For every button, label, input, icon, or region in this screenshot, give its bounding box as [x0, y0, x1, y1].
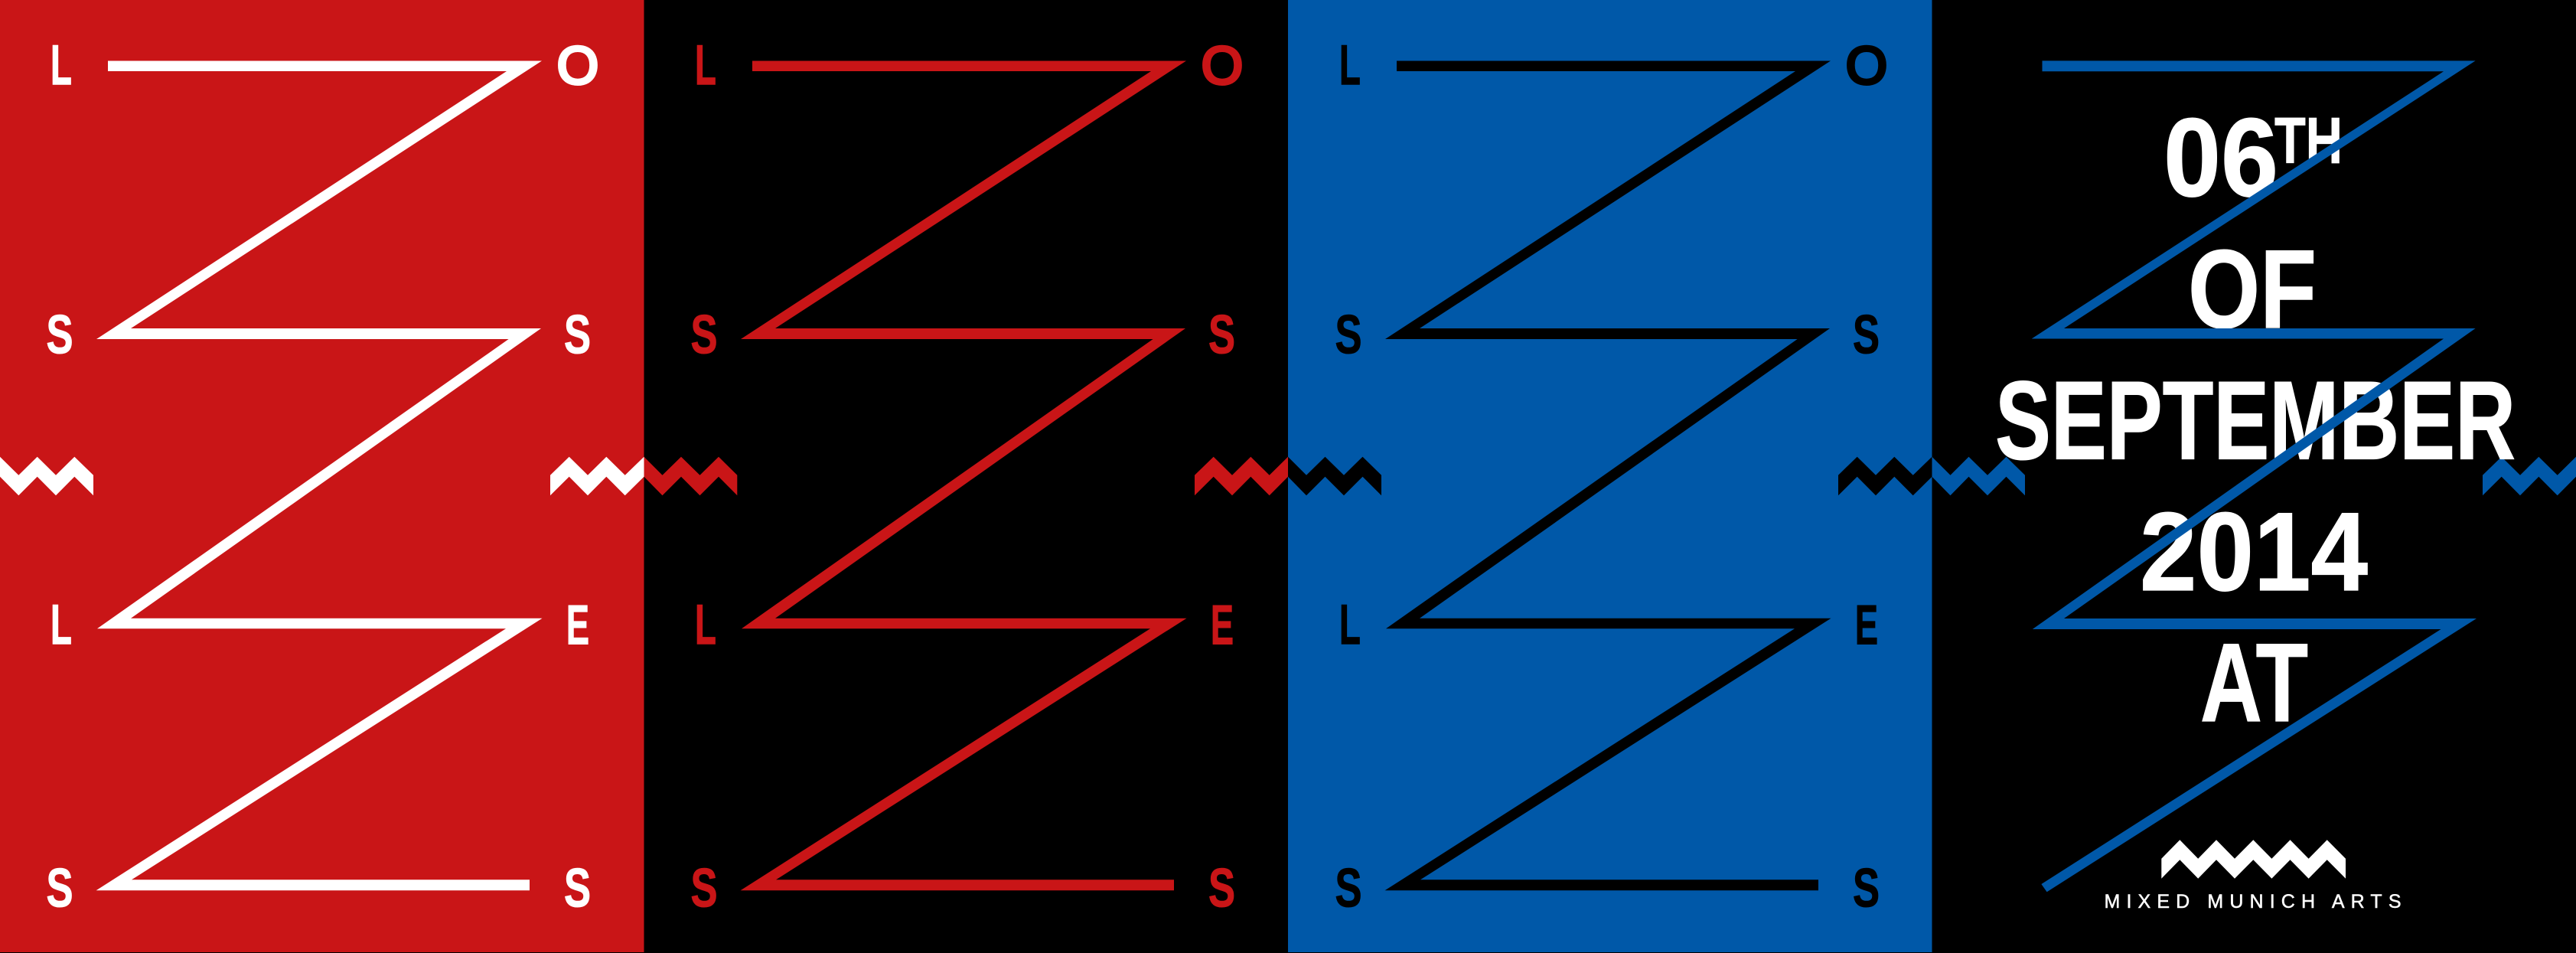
letters: L — [51, 34, 72, 96]
panel: blue — [1288, 0, 1932, 952]
letters: S — [1208, 858, 1235, 919]
zigzag: right edge — [1195, 457, 1288, 495]
zigzag: right edge — [550, 457, 644, 495]
Z line — [1385, 61, 1831, 890]
heading: date and venue: TH — [2274, 105, 2343, 178]
Z line — [741, 61, 1186, 890]
letters: L — [695, 34, 716, 96]
letters — [46, 34, 598, 919]
letters: E — [1855, 593, 1878, 656]
letters — [690, 34, 1243, 919]
logo wordmark: MIXED MUNICH ARTS — [2105, 891, 2402, 912]
letters: E — [566, 593, 589, 656]
letters: O — [557, 35, 598, 95]
letters: S — [564, 858, 591, 919]
letters: S — [1335, 305, 1362, 365]
panel: event details — [1932, 0, 2576, 953]
letters: O — [1202, 35, 1243, 95]
letters: L — [1339, 34, 1361, 96]
Z line — [96, 61, 543, 890]
letters: S — [1208, 305, 1235, 365]
zigzag: right edge — [2483, 457, 2576, 495]
letters: S — [46, 858, 73, 919]
heading: date and venue: AT — [2200, 620, 2308, 745]
heading: date and venue: 2014 — [2140, 489, 2368, 614]
letters: L — [695, 593, 716, 656]
letters: L — [51, 593, 72, 656]
Z line — [2032, 60, 2477, 892]
logo zigzag — [2161, 840, 2346, 879]
zigzag: right edge — [1838, 457, 1932, 495]
letters: S — [1853, 305, 1880, 365]
letters: S — [46, 305, 73, 365]
logo: mixed munich arts — [2105, 840, 2402, 912]
heading: date and venue — [1995, 95, 2516, 745]
letters — [1335, 34, 1887, 919]
heading: date and venue: OF — [2188, 227, 2317, 351]
letters: S — [690, 305, 718, 365]
letters: L — [1339, 593, 1361, 656]
heading: date and venue: 06 — [2164, 95, 2278, 220]
panel: red — [0, 0, 644, 952]
letters: S — [1853, 858, 1880, 919]
zigzag: left edge — [1932, 457, 2025, 495]
zigzag: left edge — [1288, 457, 1381, 495]
zigzag: left edge — [0, 457, 93, 495]
letters: S — [564, 305, 591, 365]
letters: S — [1335, 858, 1362, 919]
panel: black with red — [644, 0, 1288, 953]
zigzag: left edge — [644, 457, 737, 495]
letters: S — [690, 858, 718, 919]
letters: O — [1846, 35, 1887, 95]
letters: E — [1211, 593, 1234, 656]
